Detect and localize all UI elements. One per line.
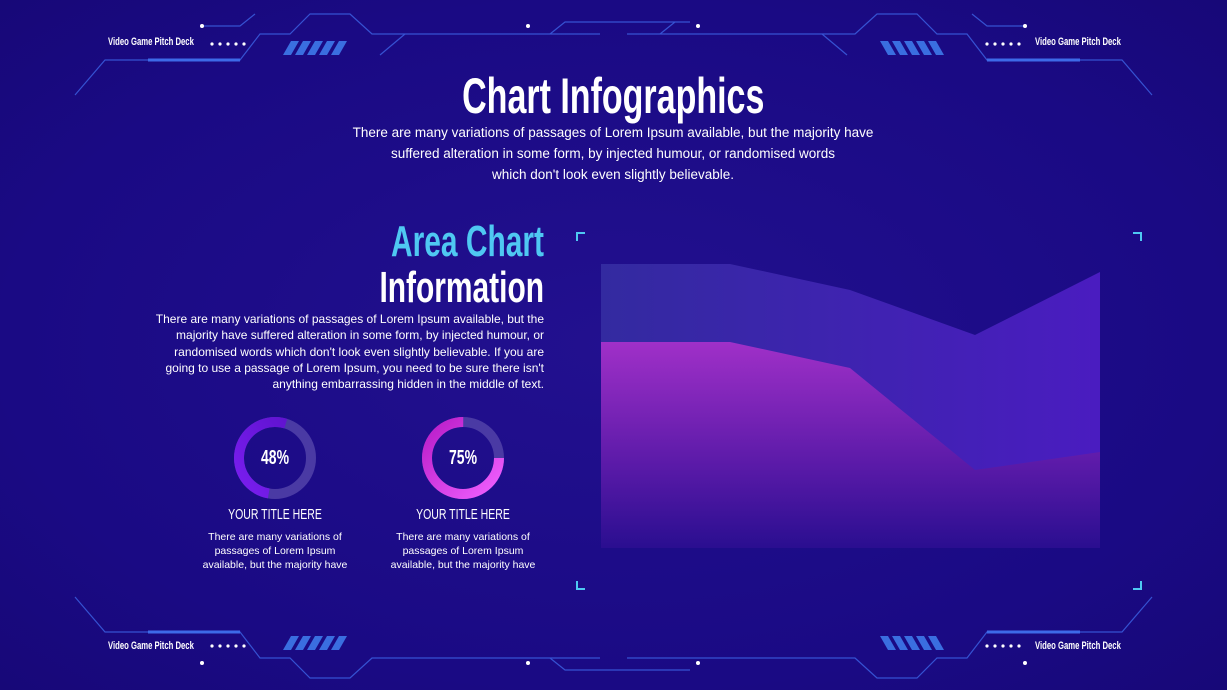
donut 75%: passages of Lorem Ipsum xyxy=(403,545,523,557)
section body text: randomised words which don't look even slightly believable. If you are xyxy=(174,345,544,359)
donut 75%: 75% xyxy=(449,447,477,469)
corner brackets xyxy=(577,233,1141,589)
back area series xyxy=(601,264,1100,548)
donut 75%: available, but the majority have xyxy=(391,559,535,571)
section body text: There are many variations of passages of Lorem Ipsum available, but the xyxy=(156,312,544,326)
subtitle: There are many variations of passages of Lorem Ipsum available, but the majority have xyxy=(353,125,873,140)
footer label right: Video Game Pitch Deck xyxy=(1035,640,1121,652)
donut 48% xyxy=(203,417,347,571)
section heading xyxy=(379,217,544,312)
header label left: Video Game Pitch Deck xyxy=(108,36,194,48)
subtitle: which don't look even slightly believable. xyxy=(492,167,734,182)
donut 75% xyxy=(391,417,535,571)
subtitle xyxy=(352,125,873,182)
subtitle: suffered alteration in some form, by injected humour, or randomised words xyxy=(391,146,835,161)
front area series xyxy=(601,342,1100,548)
section body text xyxy=(156,312,544,391)
section body text: majority have suffered alteration in some form, by injected humour, or xyxy=(176,328,544,342)
section body text: going to use a passage of Lorem Ipsum, you need to be sure there isn't xyxy=(165,361,544,375)
donut 48%: passages of Lorem Ipsum xyxy=(215,545,335,557)
donut 75%: YOUR TITLE HERE xyxy=(416,506,510,523)
header label right: Video Game Pitch Deck xyxy=(1035,36,1121,48)
donut 48%: There are many variations of xyxy=(208,531,342,543)
donut 48%: 48% xyxy=(261,447,289,469)
donut 75%: There are many variations of xyxy=(396,531,530,543)
donut 48%: YOUR TITLE HERE xyxy=(228,506,322,523)
donut 48%: available, but the majority have xyxy=(203,559,347,571)
footer label left: Video Game Pitch Deck xyxy=(108,640,194,652)
section body text: anything embarrassing hidden in the middle of text. xyxy=(272,377,544,391)
area chart xyxy=(576,232,1142,590)
section heading: Area Chart xyxy=(391,217,544,266)
title: Chart Infographics xyxy=(462,68,764,124)
section heading: Information xyxy=(379,263,544,312)
